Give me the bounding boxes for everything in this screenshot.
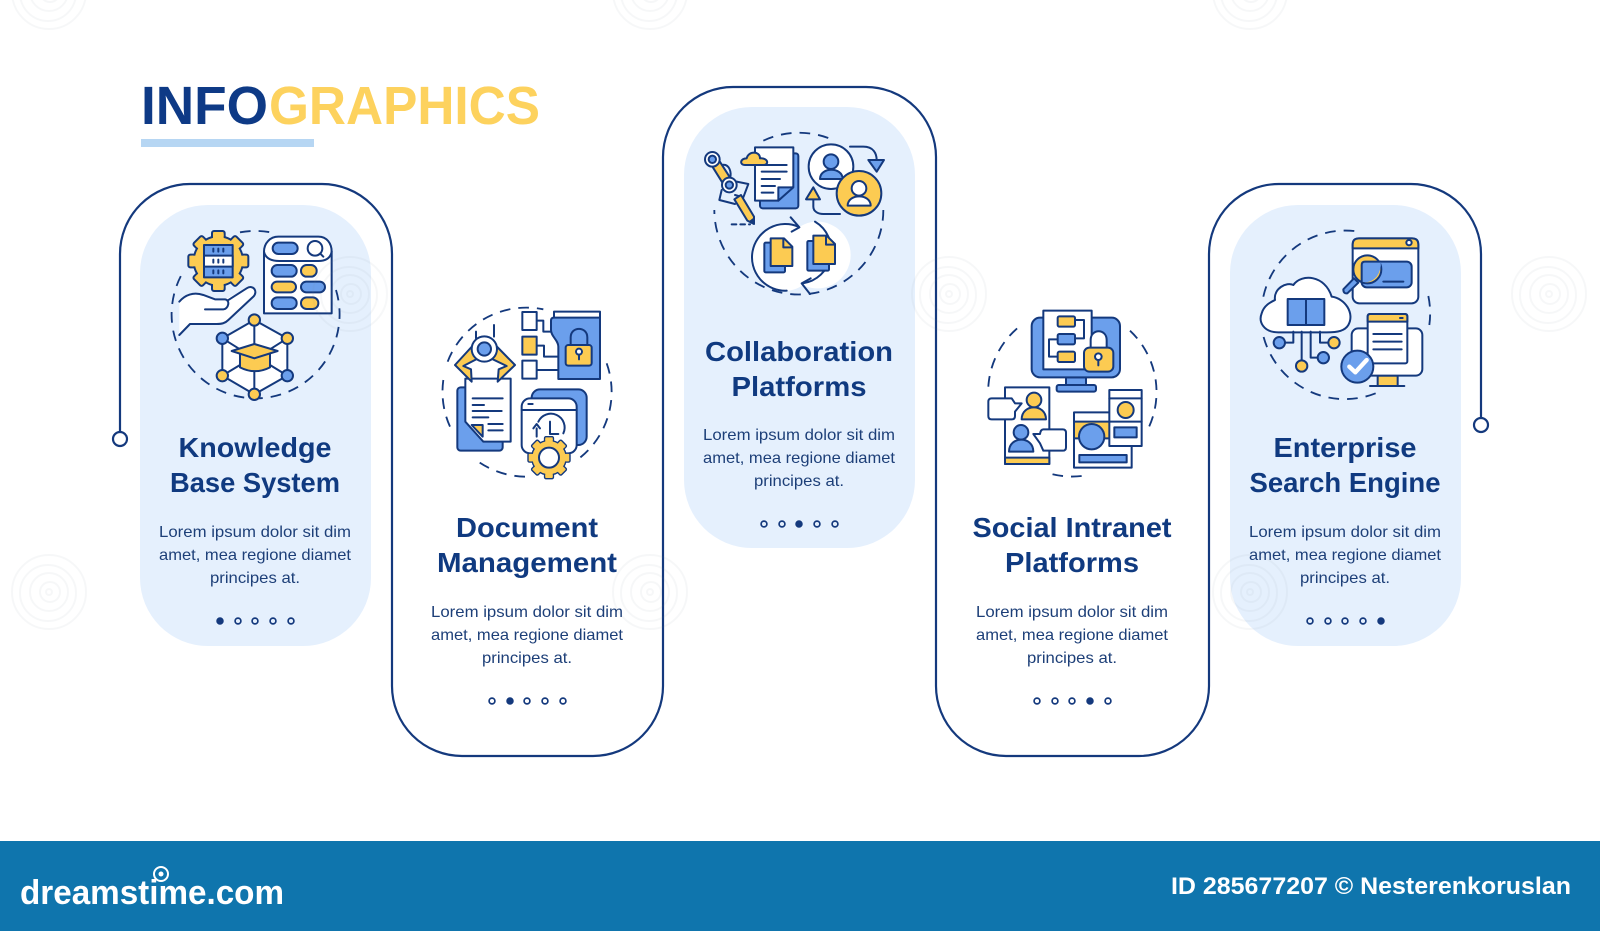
panel: card 4 text: Platforms <box>1005 547 1139 578</box>
network with graduation cap <box>217 314 293 400</box>
panel: card 2 text: principes at. <box>482 650 572 667</box>
panel: card 2 text: Lorem ipsum dolor sit dim <box>431 604 623 621</box>
monitor with org chart and lock <box>1032 311 1120 392</box>
card 2 pagination dots <box>489 698 566 704</box>
gear with server <box>188 231 248 291</box>
title underline <box>141 139 314 147</box>
panel: card 2 text: Document <box>456 512 598 543</box>
panel: card 5 text <box>1249 432 1442 587</box>
panel: card 3 background <box>684 107 915 548</box>
panel: card 3 text: principes at. <box>754 473 844 490</box>
panel: card 5 text: Lorem ipsum dolor sit dim <box>1249 524 1441 541</box>
panel: card 1 text <box>159 432 352 587</box>
icon: social intranet <box>988 311 1157 477</box>
panel: card 3 text <box>703 336 896 490</box>
panel: card 4 text: amet, mea regione diamet <box>976 627 1169 644</box>
browser window with magnifier <box>1343 238 1418 303</box>
panel: card 3 text: Lorem ipsum dolor sit dim <box>703 427 895 444</box>
panel: card 1 text: Lorem ipsum dolor sit dim <box>159 524 351 541</box>
title: GRAPHICS <box>269 76 540 136</box>
panel: card 3 text: Collaboration <box>705 336 893 367</box>
footer logo: dreamstime.com <box>20 874 284 912</box>
panel: card 1 text: Knowledge <box>178 432 332 463</box>
monitor with document and check <box>1341 314 1422 386</box>
table panel <box>264 237 332 313</box>
panel: card 4 text: principes at. <box>1027 650 1117 667</box>
sync files <box>751 217 851 294</box>
phone chat <box>988 387 1066 464</box>
panel: card 2 text <box>431 512 624 667</box>
card 5 pagination dots <box>1307 618 1384 624</box>
panel: card 2 text: Management <box>437 547 617 578</box>
panel: card 4 text: Social Intranet <box>972 512 1172 543</box>
profile cards <box>1074 390 1142 468</box>
panel: card 5 text: amet, mea regione diamet <box>1249 547 1442 564</box>
panel: card 5 text: Enterprise <box>1274 432 1416 463</box>
panel: card 5 background <box>1230 205 1461 646</box>
footer credit: ID 285677207 © Nesterenkoruslan <box>1171 873 1571 900</box>
shared document with cloud <box>741 147 798 208</box>
robot arm with pencil <box>705 152 755 225</box>
icon: document management <box>442 308 612 479</box>
serpentine outline connecting cards <box>113 87 1488 756</box>
panel: card 1 background <box>140 205 371 646</box>
folder and document <box>457 379 511 451</box>
panel: card 1 text: principes at. <box>210 570 300 587</box>
panel: card 3 text: amet, mea regione diamet <box>703 450 896 467</box>
footer bar <box>0 841 1600 931</box>
watermark spirals <box>12 0 1586 629</box>
panel: card 3 text: Platforms <box>732 371 866 402</box>
panel: card 4 text: Lorem ipsum dolor sit dim <box>976 604 1168 621</box>
panel: card 5 text: Search Engine <box>1250 467 1440 498</box>
title: INFO <box>141 76 268 136</box>
cloud with book <box>1261 278 1350 372</box>
icon: enterprise search <box>1261 231 1430 399</box>
locked folder <box>551 312 600 379</box>
card 1 pagination dots <box>217 618 294 624</box>
panel: card 1 text: amet, mea regione diamet <box>159 547 352 564</box>
panel: card 2 text: amet, mea regione diamet <box>431 627 624 644</box>
title <box>141 76 540 136</box>
users exchanging <box>806 144 884 216</box>
icon: knowledge base <box>172 231 340 400</box>
panel: card 1 text: Base System <box>170 467 340 498</box>
flow boxes <box>522 312 558 379</box>
window with clock and gear <box>522 389 587 479</box>
robot arm <box>455 325 515 382</box>
icon: collaboration <box>705 133 884 294</box>
card 3 pagination dots <box>761 521 838 527</box>
hand <box>179 287 255 335</box>
panel: card 5 text: principes at. <box>1300 570 1390 587</box>
panel: card 4 text <box>972 512 1172 667</box>
card 4 pagination dots <box>1034 698 1111 704</box>
